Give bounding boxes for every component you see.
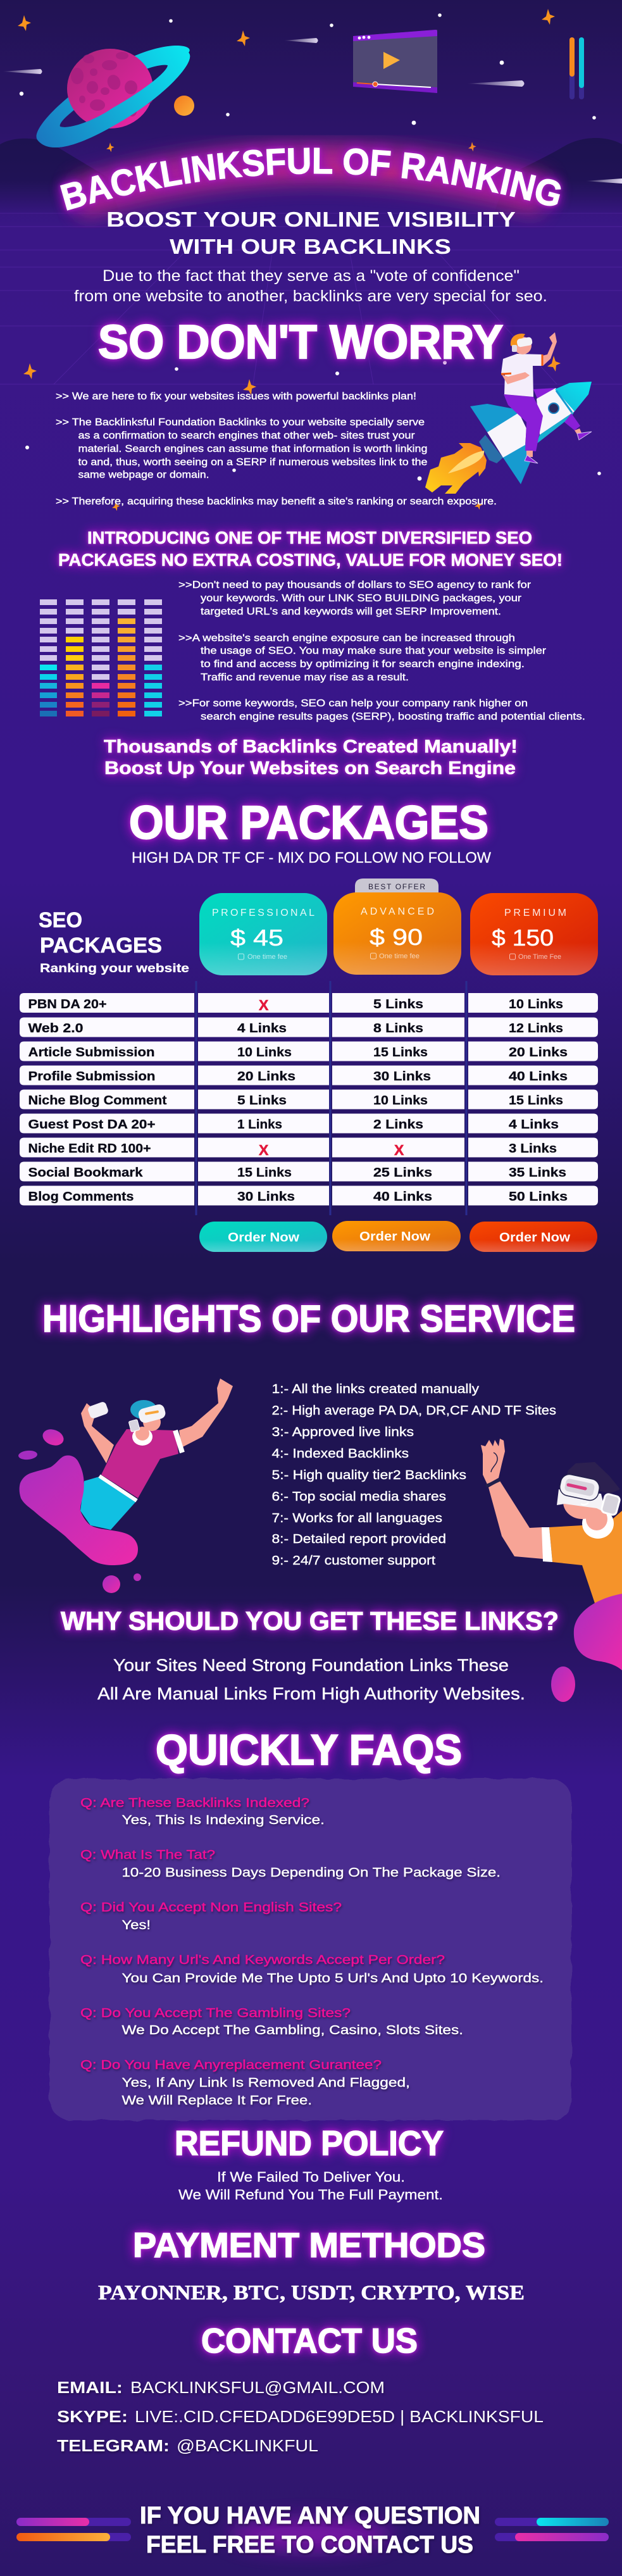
row: profile submission: 40 Links bbox=[509, 1070, 568, 1084]
text block: strong foundation links bbox=[97, 1656, 525, 1703]
faq: question 1: Q: Are These Backlinks Indexed? bbox=[80, 1796, 309, 1810]
footer call to action bbox=[140, 2503, 480, 2558]
row: web 2.0: 12 Links bbox=[509, 1022, 563, 1035]
text block: why fix: material. Search engines can assume that information is worth linking bbox=[78, 444, 428, 454]
text block: seo benefits: search engine results pages (SERP), boosting traffic and potential clients. bbox=[201, 711, 585, 722]
text block: why fix: as a confirmation to search engines that other web- sites trust your bbox=[78, 430, 415, 441]
row: niche edit rd 100+: 3 Links bbox=[509, 1142, 557, 1156]
row: article submission: 15 Links bbox=[373, 1046, 428, 1060]
row: niche blog comment: 5 Links bbox=[237, 1094, 287, 1108]
faq: question 6 bbox=[80, 2058, 410, 2108]
text block: seo benefits bbox=[178, 580, 585, 722]
row: guest post da 20+ bbox=[28, 1118, 559, 1132]
contact details: @BACKLINKFUL bbox=[177, 2436, 318, 2455]
list: service highlights: 1:- All the links created manually bbox=[272, 1382, 479, 1396]
pricing card: professional: PROFESSIONAL bbox=[212, 908, 314, 918]
starfield: dots bbox=[20, 13, 601, 480]
row: guest post da 20+: 1 Links bbox=[237, 1118, 282, 1132]
subtitle: BOOST YOUR ONLINE VISIBILITY bbox=[106, 208, 516, 231]
intro text: Due to the fact that they serve as a "vote of confidence" bbox=[103, 267, 519, 285]
faq: question 4: You Can Provide Me The Upto 5 Url's And Upto 10 Keywords. bbox=[121, 1972, 544, 1985]
row: niche blog comment: 10 Links bbox=[373, 1094, 428, 1108]
icon: video player bbox=[353, 30, 437, 93]
row: article submission: 10 Links bbox=[237, 1046, 292, 1060]
comets bbox=[2, 38, 622, 184]
row: social bookmark bbox=[28, 1166, 566, 1180]
pricing card: professional: $ 45 bbox=[230, 925, 283, 951]
text block: seo benefits: your keywords. With our LINK SEO BUILDING packages, your bbox=[201, 593, 522, 604]
row: social bookmark: 35 Links bbox=[509, 1166, 566, 1180]
row: social bookmark: Social Bookmark bbox=[28, 1166, 143, 1180]
row: blog comments: 50 Links bbox=[509, 1190, 568, 1204]
table row backgrounds bbox=[20, 993, 598, 1205]
list: service highlights: 2:- High average PA DA, DR,CF AND TF Sites bbox=[272, 1404, 556, 1418]
heading: highlights of our service: HIGHLIGHTS OF OUR SERVICE bbox=[42, 1297, 575, 1340]
footer call to action: IF YOU HAVE ANY QUESTION bbox=[140, 2503, 480, 2529]
list: service highlights: 9:- 24/7 customer support bbox=[272, 1554, 436, 1568]
row: article submission: Article Submission bbox=[28, 1046, 154, 1060]
subtitle bbox=[106, 208, 516, 258]
faq: question 3 bbox=[80, 1901, 342, 1932]
intro text bbox=[74, 267, 547, 305]
row: web 2.0: 8 Links bbox=[373, 1022, 423, 1035]
list: service highlights: 5:- High quality tier2 Backlinks bbox=[272, 1468, 466, 1482]
text block: seo benefits: Traffic and revenue may rise as a result. bbox=[201, 672, 409, 683]
heading: thousands of backlinks: Boost Up Your Websites on Search Engine bbox=[104, 758, 516, 778]
pricing card: premium: One Time Fee bbox=[518, 953, 561, 961]
order button: advanced bbox=[332, 1221, 461, 1251]
intro text: from one website to another, backlinks are very special for seo. bbox=[74, 287, 547, 305]
illustration: vr person with raised hand bbox=[481, 1439, 622, 1603]
heading: payment methods: PAYMENT METHODS bbox=[133, 2225, 485, 2265]
text block: strong foundation links: Your Sites Need Strong Foundation Links These bbox=[113, 1656, 509, 1675]
faq: question 1: Yes, This Is Indexing Service. bbox=[121, 1813, 325, 1827]
flame bbox=[425, 443, 487, 494]
faq: question 4: Q: How Many Url's And Keywords Accept Per Order? bbox=[80, 1953, 445, 1967]
faq: question 2: Q: What Is The Tat? bbox=[80, 1848, 215, 1862]
row: web 2.0 bbox=[28, 1022, 563, 1035]
subtitle: WITH OUR BACKLINKS bbox=[170, 235, 451, 258]
pricing card: advanced: One time fee bbox=[379, 953, 420, 960]
text block: strong foundation links: All Are Manual Links From High Authority Websites. bbox=[97, 1684, 525, 1703]
faq: question 3: Yes! bbox=[121, 1918, 151, 1932]
row: guest post da 20+: 4 Links bbox=[509, 1118, 559, 1132]
faq: question 6: We Will Replace It For Free. bbox=[121, 2094, 312, 2108]
panel: seo packages label: PACKAGES bbox=[40, 934, 162, 958]
pricing card: premium: $ 150 bbox=[492, 925, 554, 951]
faq: question 5: We Do Accept The Gambling, Casino, Slots Sites. bbox=[121, 2023, 463, 2037]
text block: why fix: >> The Backlinksful Foundation Backlinks to your website specially serve bbox=[56, 417, 425, 428]
row: profile submission: 30 Links bbox=[373, 1070, 431, 1084]
heading: introducing bbox=[58, 528, 563, 570]
faq: question 5: Q: Do You Accept The Gambling Sites? bbox=[80, 2006, 351, 2020]
footer bars: right bbox=[495, 2518, 609, 2541]
text block: why fix: to and, thus, worth seeing on a SERP if numerous websites link to the bbox=[78, 457, 428, 468]
row: pbn da 20+ bbox=[28, 997, 563, 1013]
illustration: surfer with phone bbox=[18, 1379, 233, 1593]
best offer tab: BEST OFFER bbox=[368, 882, 425, 891]
panel: faq background bbox=[49, 1779, 571, 2120]
glow: footer bbox=[228, 2520, 392, 2550]
row: niche blog comment: Niche Blog Comment bbox=[28, 1094, 167, 1108]
panel: seo packages label: Ranking your website bbox=[40, 962, 189, 975]
order button: advanced: Order Now bbox=[359, 1230, 430, 1244]
table: package comparison bbox=[20, 981, 598, 1215]
faq: question 5 bbox=[80, 2006, 463, 2037]
row: guest post da 20+: Guest Post DA 20+ bbox=[28, 1118, 156, 1132]
list: service highlights bbox=[272, 1382, 556, 1568]
contact details: EMAIL: bbox=[57, 2378, 123, 2397]
row: blog comments: Blog Comments bbox=[28, 1190, 134, 1204]
list: service highlights: 6:- Top social media shares bbox=[272, 1490, 446, 1504]
row: niche edit rd 100+: X bbox=[259, 1142, 269, 1158]
text block: refund terms bbox=[178, 2169, 443, 2203]
heading: introducing: PACKAGES NO EXTRA COSTING, VALUE FOR MONEY SEO! bbox=[58, 550, 563, 570]
faq: question 6: Yes, If Any Link Is Removed And Flagged, bbox=[121, 2076, 410, 2090]
text block: seo benefits: the usage of SEO. You may make sure that your website is simpler bbox=[201, 646, 547, 656]
heading: introducing: INTRODUCING ONE OF THE MOST DIVERSIFIED SEO bbox=[87, 528, 532, 547]
pricing card: advanced: ADVANCED bbox=[361, 906, 434, 917]
heading: why should you get these links: WHY SHOULD YOU GET THESE LINKS? bbox=[61, 1606, 559, 1635]
hills bbox=[0, 138, 622, 215]
list: service highlights: 8:- Detailed report provided bbox=[272, 1532, 446, 1546]
icon: ringed planet bbox=[37, 46, 190, 147]
text block: refund terms: If We Failed To Deliver You. bbox=[217, 2169, 405, 2185]
text block: why fix: same webpage or domain. bbox=[78, 470, 209, 480]
panel: seo packages label bbox=[39, 908, 189, 975]
pricing card: advanced: $ 90 bbox=[370, 924, 423, 950]
text block: seo benefits: >>Don't need to pay thousands of dollars to SEO agency to rank for bbox=[178, 580, 532, 591]
row: niche blog comment: 15 Links bbox=[509, 1094, 563, 1108]
contact details: TELEGRAM: bbox=[57, 2436, 170, 2455]
rocket bbox=[470, 382, 592, 484]
list: service highlights: 4:- Indexed Backlinks bbox=[272, 1447, 409, 1461]
row: niche edit rd 100+ bbox=[28, 1142, 557, 1158]
chart: equalizer bars bbox=[40, 599, 162, 716]
text block: seo benefits: >>For some keywords, SEO can help your company rank higher on bbox=[178, 698, 528, 709]
row: web 2.0: 4 Links bbox=[237, 1022, 287, 1035]
row: pbn da 20+: 10 Links bbox=[509, 997, 563, 1011]
row: niche edit rd 100+: Niche Edit RD 100+ bbox=[28, 1142, 151, 1156]
row: profile submission bbox=[28, 1070, 568, 1084]
contact details: LIVE:.CID.CFEDADD6E99DE5D | BACKLINKSFUL bbox=[135, 2407, 544, 2426]
pricing card: premium: PREMIUM bbox=[504, 908, 566, 918]
faq: question 2: 10-20 Business Days Depending On The Package Size. bbox=[121, 1866, 501, 1880]
row: blog comments bbox=[28, 1190, 568, 1204]
faq: question 6: Q: Do You Have Anyreplacement Gurantee? bbox=[80, 2058, 382, 2072]
icon: level bars bbox=[569, 37, 584, 99]
row: article submission: 20 Links bbox=[509, 1046, 568, 1060]
order button: professional bbox=[199, 1222, 327, 1252]
heading: contact us: CONTACT US bbox=[201, 2321, 418, 2360]
decorative blob: magenta wave bbox=[551, 1594, 622, 1702]
hero grid floor bbox=[0, 213, 622, 384]
text block: why fix: >> Therefore, acquiring these backlinks may benefit a site's ranking or search exposure. bbox=[56, 496, 497, 507]
row: guest post da 20+: 2 Links bbox=[373, 1118, 423, 1132]
faq: question 2 bbox=[80, 1848, 501, 1880]
row: niche blog comment bbox=[28, 1094, 563, 1108]
contact details bbox=[57, 2378, 544, 2455]
list: service highlights: 7:- Works for all languages bbox=[272, 1511, 442, 1525]
row: web 2.0: Web 2.0 bbox=[28, 1022, 84, 1035]
order button: professional: Order Now bbox=[228, 1230, 299, 1244]
row: article submission bbox=[28, 1046, 568, 1060]
rider bbox=[501, 332, 592, 463]
heading: refund policy: REFUND POLICY bbox=[175, 2123, 444, 2163]
row: social bookmark: 25 Links bbox=[373, 1166, 432, 1180]
heading: thousands of backlinks bbox=[104, 737, 518, 778]
list: service highlights: 3:- Approved live links bbox=[272, 1425, 414, 1439]
heading: thousands of backlinks: Thousands of Backlinks Created Manually! bbox=[104, 737, 518, 757]
heading: so don't worry: SO DON'T WORRY bbox=[98, 315, 503, 368]
row: pbn da 20+: X bbox=[259, 997, 269, 1013]
row: pbn da 20+: 5 Links bbox=[373, 997, 423, 1011]
text block: why fix bbox=[56, 391, 497, 507]
title: backlinksful of ranking: BACKLINKSFUL OF RANKING bbox=[53, 141, 568, 216]
pricing card: advanced bbox=[333, 892, 461, 975]
row: profile submission: Profile Submission bbox=[28, 1070, 156, 1084]
row: blog comments: 30 Links bbox=[237, 1190, 295, 1204]
row: blog comments: 40 Links bbox=[373, 1190, 432, 1204]
row: pbn da 20+: PBN DA 20+ bbox=[28, 997, 106, 1011]
faq: question 4 bbox=[80, 1953, 544, 1985]
panel: seo packages label: SEO bbox=[39, 908, 82, 932]
pricing card: professional: One time fee bbox=[247, 953, 287, 961]
footer call to action: FEEL FREE TO CONTACT US bbox=[146, 2532, 473, 2558]
faq: question 3: Q: Did You Accept Non English Sites? bbox=[80, 1901, 342, 1915]
order button: premium bbox=[470, 1222, 597, 1252]
text block: seo benefits: targeted URL's and keywords will get SERP Improvement. bbox=[201, 606, 501, 617]
text block: refund terms: We Will Refund You The Full Payment. bbox=[178, 2187, 443, 2203]
faq: question 1 bbox=[80, 1796, 325, 1827]
illustration: rocket rider bbox=[425, 332, 592, 494]
contact details: BACKLINKSFUL@GMAIL.COM bbox=[130, 2378, 385, 2397]
heading: quickly faqs: QUICKLY FAQS bbox=[156, 1726, 462, 1774]
text block: seo benefits: >>A website's search engine exposure can be increased through bbox=[178, 633, 515, 644]
starfield: orange stars bbox=[18, 9, 561, 511]
order button: premium: Order Now bbox=[499, 1230, 570, 1244]
subheading: high da dr: HIGH DA DR TF CF - MIX DO FOLLOW NO FOLLOW bbox=[132, 849, 491, 866]
text block: why fix: >> We are here to fix your websites issues with powerful backlinks plan! bbox=[56, 391, 416, 402]
row: social bookmark: 15 Links bbox=[237, 1166, 292, 1180]
icon: orange moon bbox=[174, 96, 194, 116]
text: payment options: PAYONNER, BTC, USDT, CRYPTO, WISE bbox=[98, 2282, 525, 2304]
contact details: SKYPE: bbox=[57, 2407, 128, 2426]
best offer tab bbox=[355, 878, 439, 894]
heading: our packages: OUR PACKAGES bbox=[129, 796, 488, 849]
row: profile submission: 20 Links bbox=[237, 1070, 295, 1084]
row: niche edit rd 100+: X bbox=[394, 1142, 404, 1158]
text block: seo benefits: to find and access by optimizing it for search engine indexing. bbox=[201, 659, 525, 670]
pricing card: professional bbox=[199, 893, 327, 975]
footer bars: left bbox=[16, 2518, 131, 2541]
pricing card: premium bbox=[470, 893, 598, 975]
